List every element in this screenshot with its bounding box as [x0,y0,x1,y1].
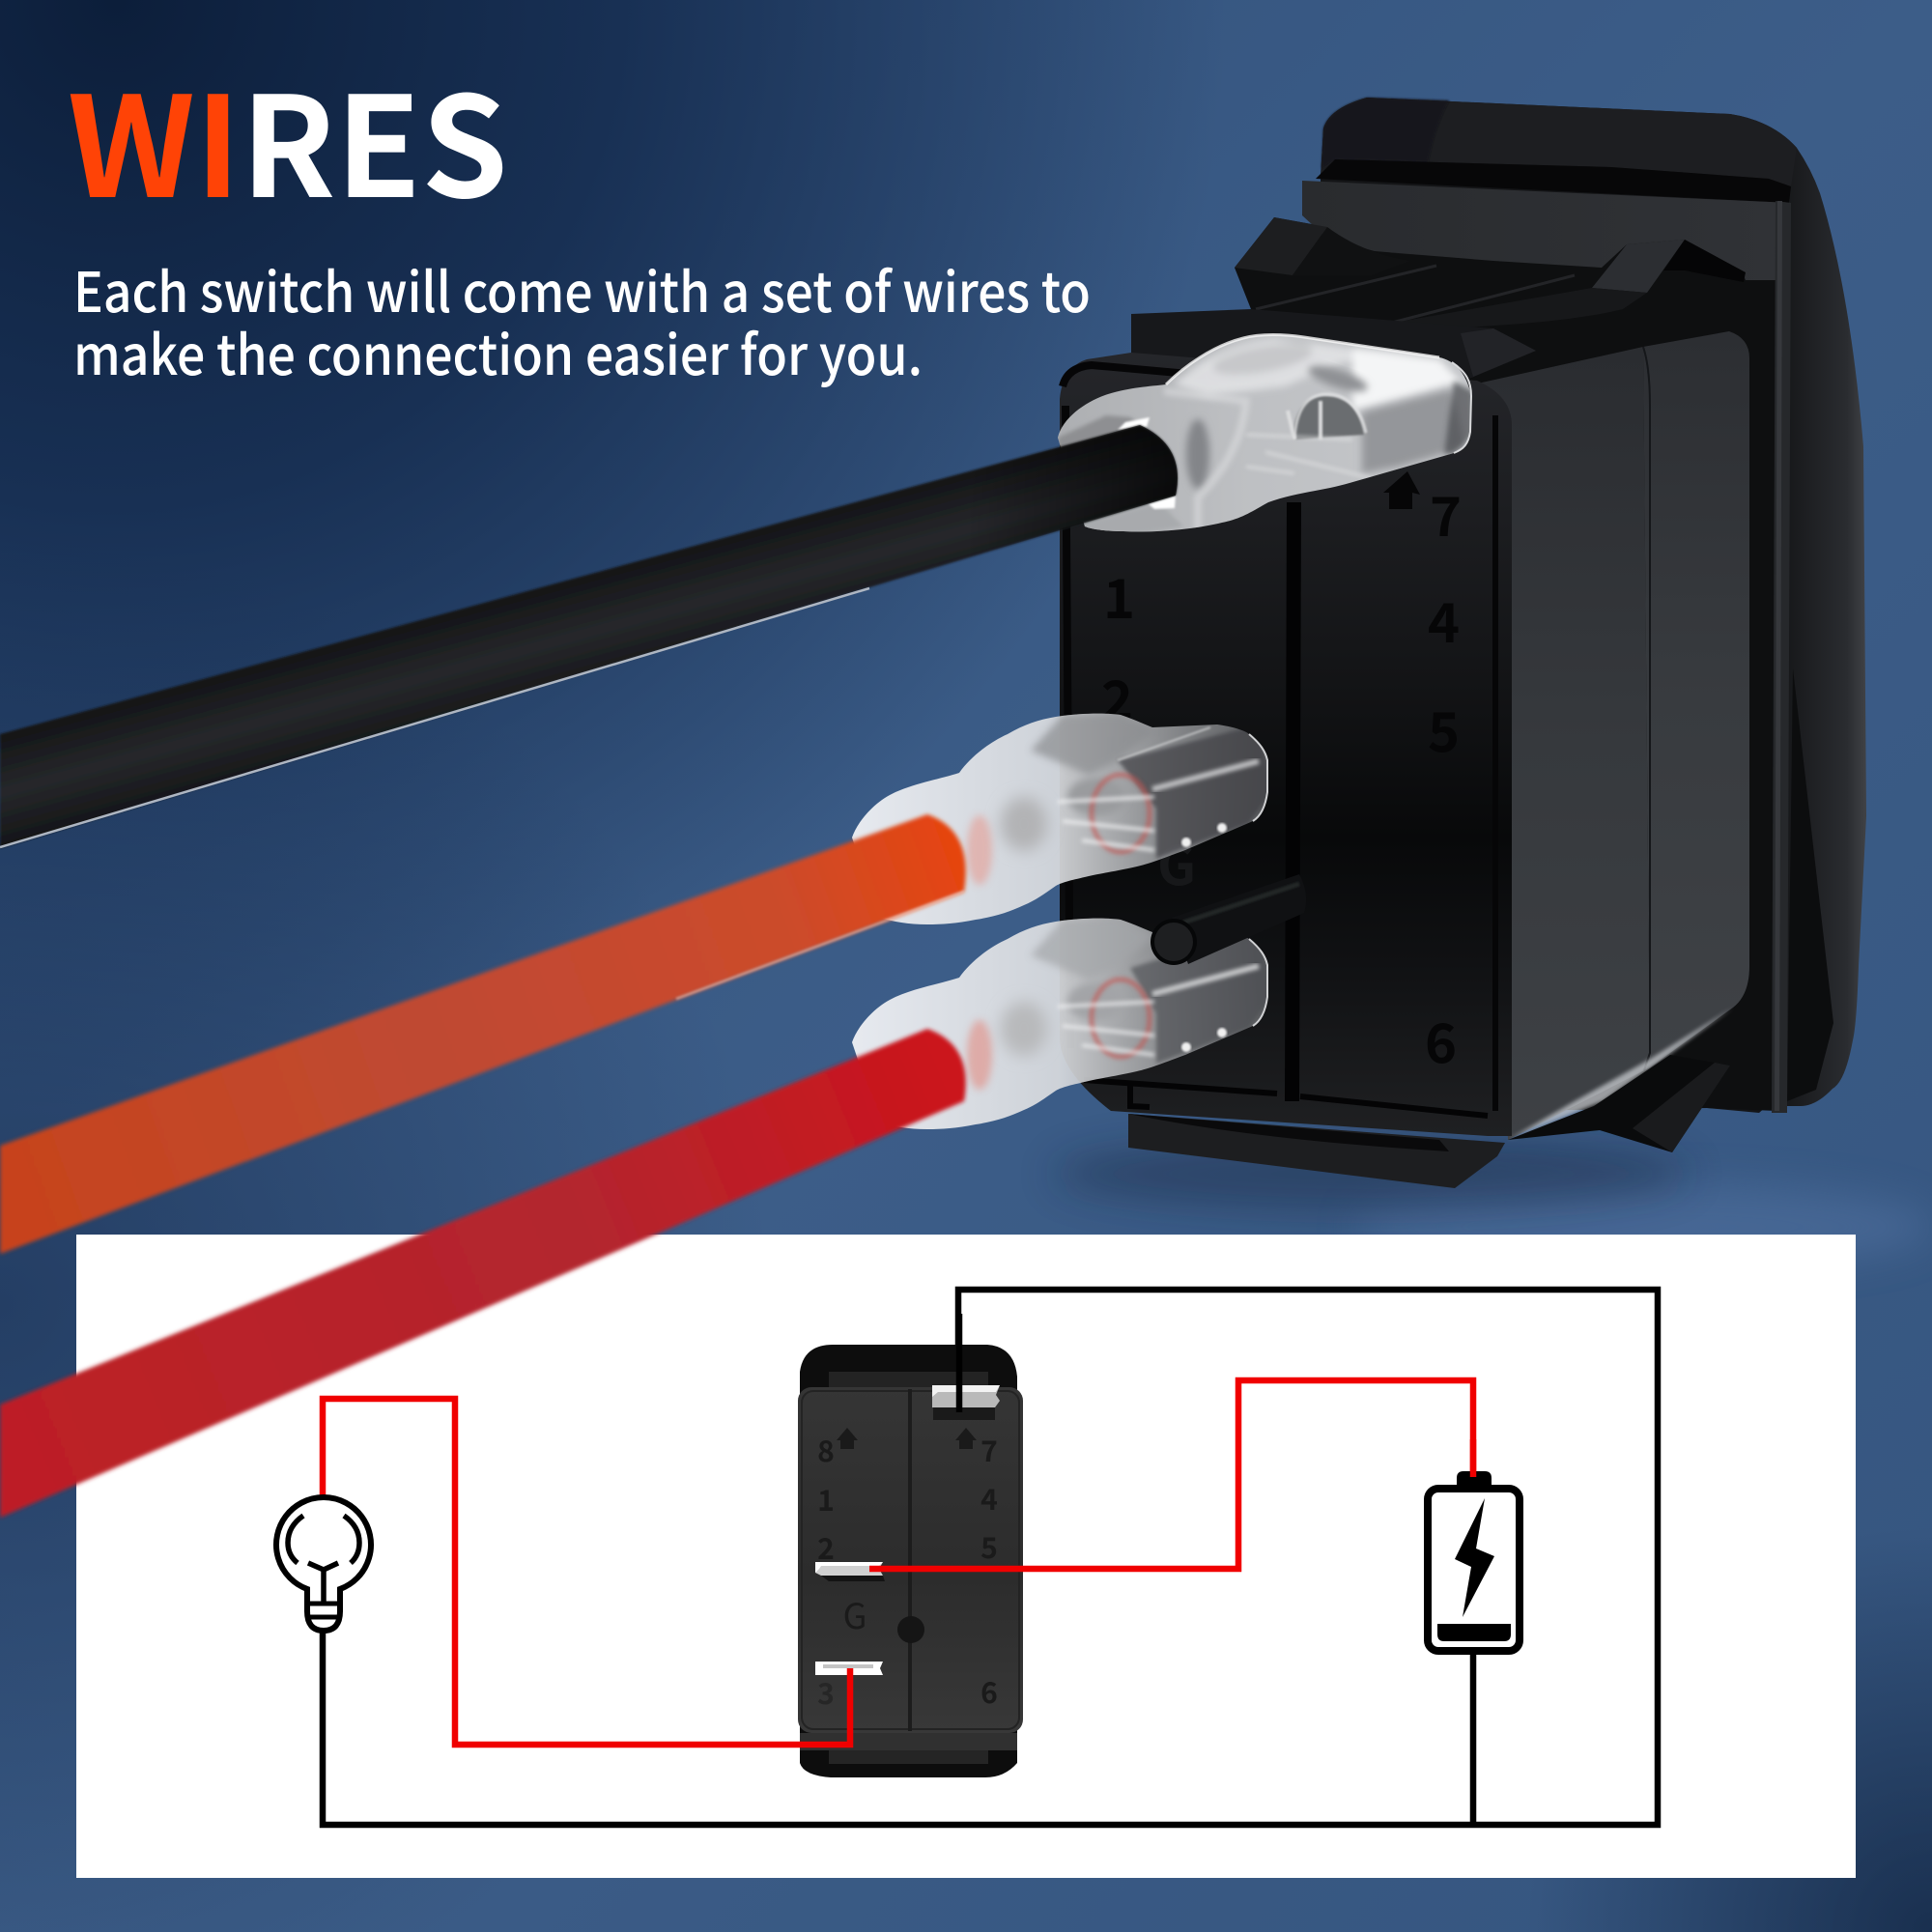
rear clip strip [1131,309,1536,379]
icon: switch rear view [798,1345,1023,1777]
ground pin [1151,874,1306,965]
molded numbers: 7 [1430,474,1462,553]
description text: make the connection easier for you. [73,312,923,391]
connector: black wire terminal [1058,334,1473,541]
rocker cap [1321,98,1866,1113]
description text: Each switch will come with a set of wires to [73,249,1091,328]
switch terminal numbers: 5 [980,1524,998,1567]
switch terminal numbers: 6 [980,1669,998,1712]
switch terminal numbers: 8 [817,1428,835,1470]
bottom lip [1128,1114,1505,1188]
black wire [0,425,1178,848]
red circuit wire: switch to battery [869,1380,1473,1569]
orange wire [0,814,966,1254]
black wire over switch terminal [956,1314,962,1412]
panel: wiring diagram [76,1235,1856,1878]
switch terminal numbers: 1 [817,1477,835,1520]
description text [73,249,1091,391]
red wire [0,1029,966,1518]
red circuit wire: bulb to switch [323,1399,850,1745]
rocker top face [1321,98,1797,186]
switch terminal numbers: 3 [817,1670,835,1713]
arrow mark [1383,471,1420,509]
side highlight [1508,1008,1733,1140]
connector: red wire terminal [852,918,1271,1129]
switch shadow [1053,1137,1690,1210]
molded numbers: G [1157,823,1196,901]
terminal bottom [815,1662,883,1675]
switch terminal numbers: 4 [980,1476,998,1519]
locking wedge left [1235,217,1327,275]
molded numbers: 2 [1101,658,1133,736]
plate edge strip [1772,201,1791,1113]
molded numbers: 5 [1428,690,1460,768]
rear body mass [1217,217,1777,1111]
switch terminal numbers: 7 [980,1428,998,1470]
icon: battery [1428,1439,1520,1651]
center divider [1285,502,1301,1101]
wedge ridge lines [1256,266,1575,324]
terminal top [932,1385,1000,1420]
ground pin dot [897,1616,924,1643]
switch terminal numbers: 2 [817,1525,835,1568]
rear face frame [1063,365,1275,1048]
icon: light bulb [276,1497,371,1631]
switch terminal numbers [817,1428,998,1713]
terminal middle [815,1562,885,1581]
side face rear section [1643,331,1749,1067]
switch product render [1053,98,1866,1210]
bottom tab [1508,1055,1730,1152]
rocker lower black facet [1787,668,1833,1101]
switch terminal numbers: G [843,1589,867,1639]
mounting plate top [1302,181,1791,280]
switch arrows [837,1428,977,1449]
black circuit wire [323,1290,1658,1825]
side face front section [1473,347,1650,1140]
molded numbers [1101,474,1462,1079]
title: WIRES [68,37,508,238]
connector: orange wire terminal [852,713,1271,924]
rocker dark groove [1316,159,1791,203]
molded numbers: 1 [1103,556,1135,635]
locking wedge right [1592,240,1685,293]
molded numbers: 6 [1425,1001,1457,1079]
rear face with terminal numbers [1060,353,1512,1136]
molded numbers: 4 [1428,581,1460,659]
